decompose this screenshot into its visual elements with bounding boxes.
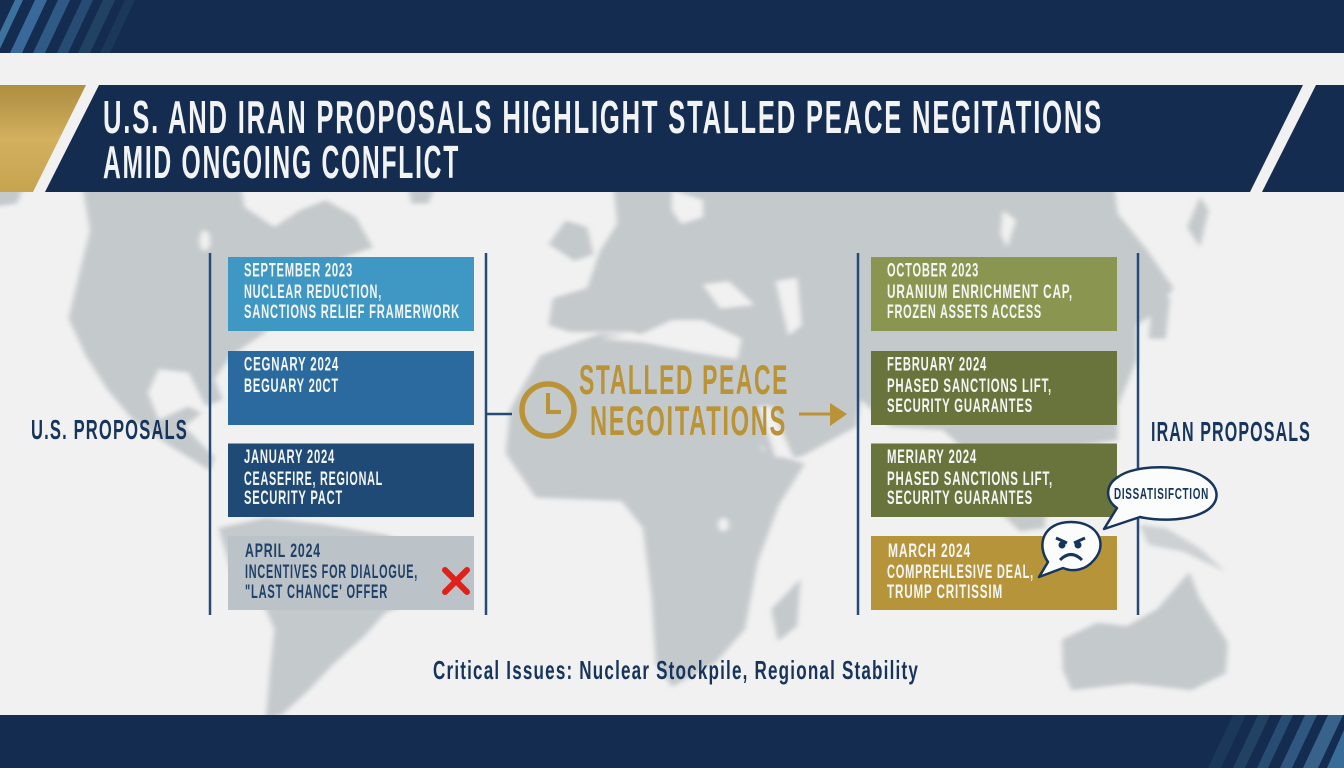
panel: U.S. proposal September 2023 bbox=[228, 257, 474, 331]
panel: U.S. proposal September 2023: NUCLEAR REDUCTION, bbox=[244, 281, 382, 303]
panel: U.S. proposal January 2024: JANUARY 2024 bbox=[244, 446, 335, 468]
panel: Iran proposal Meriary 2024: MERIARY 2024 bbox=[887, 446, 977, 468]
center: stalled peace negotiations bbox=[522, 356, 847, 444]
panel: U.S. proposal April 2024 bbox=[228, 536, 474, 610]
navy ribbon bbox=[45, 85, 1303, 192]
panel: Iran proposal Meriary 2024 bbox=[871, 444, 1117, 517]
panel: Iran proposal March 2024: COMPREHLESIVE DEAL, bbox=[887, 561, 1034, 583]
panel: U.S. proposal Cegnary 2024 bbox=[228, 351, 474, 425]
U.S. proposals label: U.S. PROPOSALS bbox=[31, 414, 188, 445]
panel: U.S. proposal September 2023: SEPTEMBER 2023 bbox=[244, 260, 353, 282]
panel: Iran proposal March 2024: TRUMP CRITISSIM bbox=[887, 581, 1003, 603]
gold accent bbox=[0, 85, 86, 192]
panel: Iran proposal March 2024 bbox=[871, 536, 1117, 610]
panel: U.S. proposal April 2024: "LAST CHANCE' OFFER bbox=[245, 581, 388, 603]
panel: Iran proposal March 2024: MARCH 2024 bbox=[888, 540, 971, 562]
panel: U.S. proposal April 2024: APRIL 2024 bbox=[245, 540, 321, 562]
title banner bbox=[0, 85, 1344, 192]
navy ribbon end bbox=[1262, 85, 1344, 192]
U.S. timeline frame bbox=[210, 253, 512, 615]
panel: U.S. proposal Cegnary 2024: CEGNARY 2024 bbox=[244, 354, 339, 376]
top navy bar bbox=[0, 0, 1344, 53]
panel: Iran proposal Meriary 2024: PHASED SANCTIONS LIFT, bbox=[887, 468, 1053, 490]
arrow bbox=[799, 403, 847, 426]
panel: Iran proposal February 2024 bbox=[871, 351, 1117, 425]
center heading: STALLED PEACE bbox=[579, 356, 789, 403]
icon: red cross bbox=[445, 570, 467, 592]
panel: U.S. proposal April 2024: INCENTIVES FOR DIALOGUE, bbox=[245, 561, 418, 583]
callout: dissatisfaction bubble: DISSATISIFCTION bbox=[1114, 486, 1209, 503]
panel: Iran proposal February 2024: FEBRUARY 2024 bbox=[887, 354, 987, 376]
panel: Iran proposal October 2023: OCTOBER 2023 bbox=[887, 260, 979, 282]
panel: Iran proposal October 2023 bbox=[871, 257, 1117, 331]
center heading: NEGOITATIONS bbox=[590, 397, 787, 444]
icon: clock bbox=[522, 384, 574, 436]
panel: Iran proposal October 2023: FROZEN ASSETS ACCESS bbox=[887, 301, 1042, 323]
icon: angry face bubble bbox=[1039, 522, 1101, 577]
bottom navy bar bbox=[0, 715, 1344, 768]
Iran timeline frame bbox=[858, 253, 1138, 615]
panel: Iran proposal October 2023: URANIUM ENRICHMENT CAP, bbox=[887, 281, 1073, 303]
title: AMID ONGOING CONFLICT bbox=[103, 136, 460, 188]
panel: U.S. proposal January 2024: SECURITY PACT bbox=[244, 487, 343, 509]
panel: Iran proposal February 2024: PHASED SANCTIONS LIFT, bbox=[887, 375, 1052, 397]
panel: U.S. proposal Cegnary 2024: BEGUARY 20CT bbox=[244, 375, 339, 397]
panel: U.S. proposal January 2024: CEASEFIRE, REGIONAL bbox=[244, 468, 383, 490]
critical issues note: Critical Issues: Nuclear Stockpile, Regional Stability bbox=[433, 655, 919, 685]
callout: dissatisfaction bubble bbox=[1104, 467, 1217, 529]
world map background bbox=[0, 180, 1228, 721]
panel: Iran proposal February 2024: SECURITY GUARANTES bbox=[887, 395, 1033, 417]
panel: Iran proposal Meriary 2024: SECURITY GUARANTES bbox=[887, 487, 1033, 509]
panel: U.S. proposal January 2024 bbox=[228, 444, 474, 517]
panel: U.S. proposal September 2023: SANCTIONS RELIEF FRAMERWORK bbox=[244, 301, 460, 323]
